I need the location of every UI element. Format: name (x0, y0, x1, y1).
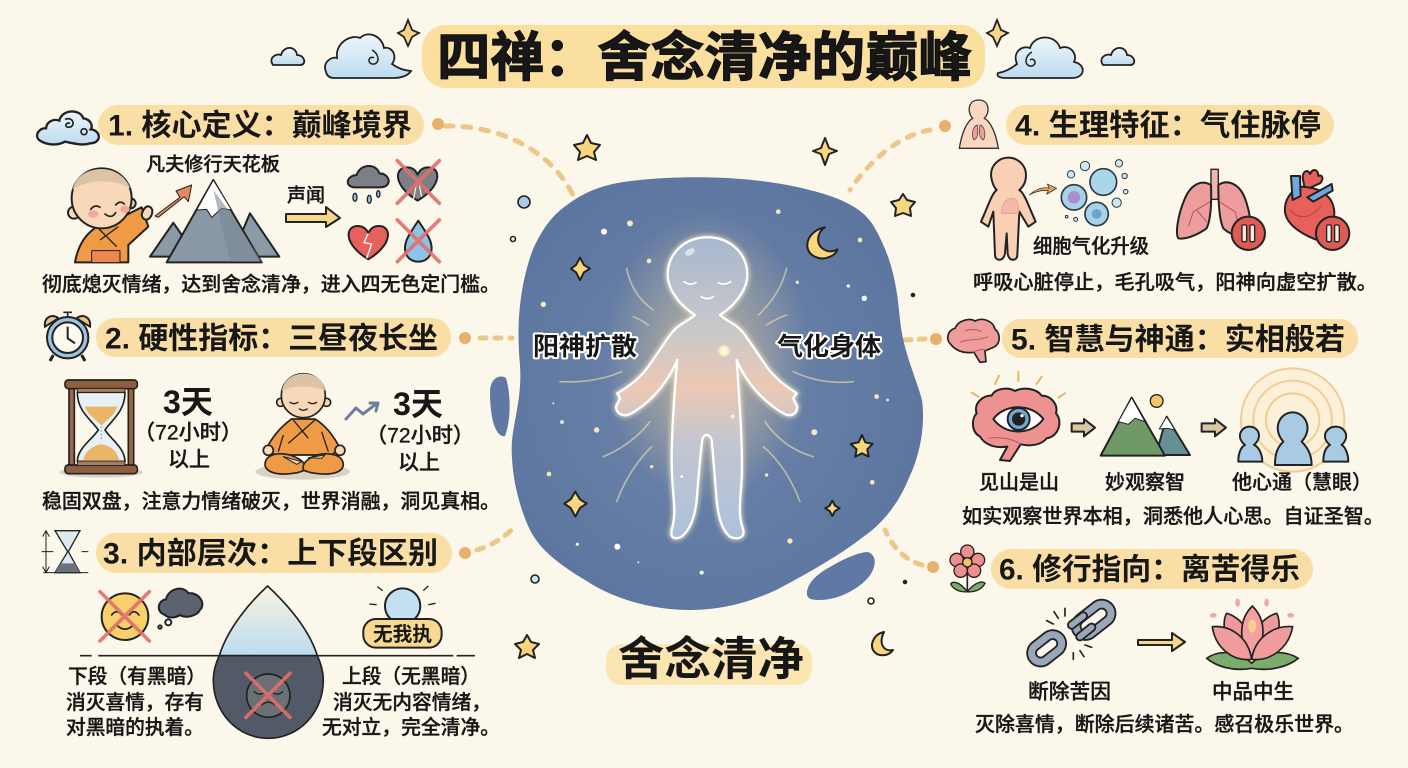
text: 3 days left: 以上 (168, 448, 210, 472)
text: section 5 summary: 如实观察世界本相，洞悉他人心思。自证圣智。 (962, 505, 1384, 528)
illustration: hourglass (59, 380, 143, 478)
illustration: monk points to mountain (68, 168, 279, 263)
label: cell upgrade: 细胞气化升级 (1033, 235, 1149, 258)
panel: section 6 (950, 545, 1354, 736)
labels: three stages (979, 471, 1372, 494)
icon: squiggle arrow (346, 403, 378, 419)
labels: cut causes and rebirth: 中品中生 (1212, 680, 1294, 704)
icon: cloud (37, 111, 99, 144)
illustration: no-self orb (363, 586, 442, 648)
heading pill: 6. 修行指向：离苦得乐 (999, 554, 1300, 586)
figure glow (604, 210, 811, 503)
panel: section 2 (42, 312, 500, 513)
figure outline and face (616, 237, 797, 538)
illustration: broken chain (1028, 600, 1115, 666)
text: upper stage: 无对立，完全清净。 (322, 716, 500, 739)
illustration: body to cells (981, 158, 1128, 260)
connector end dots (432, 118, 951, 573)
labels: three stages: 他心通（慧眼） (1232, 471, 1372, 494)
text: lower stage (66, 665, 206, 739)
energy streaks (560, 268, 853, 502)
panel: section 5 (948, 319, 1384, 528)
icons: removed emotions (348, 161, 439, 262)
stars and dots (541, 209, 889, 575)
text: section 4 summary: 呼吸心脏停止，毛孔吸气，阳神向虚空扩散。 (973, 271, 1377, 294)
text: lower stage: 消灭喜情，存有 (66, 691, 204, 714)
blob side pieces (490, 377, 875, 600)
connector: section 1 to centre (445, 126, 573, 195)
labels: cut causes and rebirth (1028, 680, 1294, 704)
icon: body with lungs (959, 100, 998, 148)
text: section 1 summary: 彻底熄灭情绪，达到舍念清净，进入四无色定门槛。 (42, 272, 500, 296)
illustration: drop of two stages (80, 586, 475, 738)
text: 3 days left: 3天 (163, 384, 213, 420)
figure silhouette glow (616, 237, 797, 538)
text: 3 days right: 3天 (393, 386, 443, 422)
text: upper stage: 上段（无黑暗） (342, 665, 480, 688)
panel: section 1 (37, 105, 500, 296)
decorative stars around centre (515, 135, 915, 658)
illustration: lower-stage icons (100, 589, 202, 641)
illustration: meditating monk (255, 374, 350, 480)
text: 3 days left (134, 384, 242, 472)
title banner: 四禅：舍念清净的巅峰 (437, 28, 972, 88)
icon: top right clouds and star (987, 20, 1134, 78)
label: 无我执: 无我执 (373, 623, 432, 646)
heading pill: 3. 内部层次：上下段区别 (103, 538, 438, 570)
label: 声闻: 声闻 (287, 184, 325, 206)
heading pill: 5. 智慧与神通：实相般若 (1011, 324, 1345, 356)
labels: three stages: 见山是山 (979, 471, 1059, 494)
labels: cut causes and rebirth: 断除苦因 (1028, 680, 1111, 704)
connector: section 3 to centre (477, 525, 516, 550)
text: 3 days right: 以上 (398, 452, 440, 474)
illustration: lotus (1207, 599, 1298, 669)
connector: section 4 to centre (850, 130, 930, 190)
label: 气化身体: 气化身体 (777, 333, 881, 361)
text: upper stage: 消灭无内容情绪， (333, 691, 491, 714)
connector: section 2 to centre (480, 336, 512, 340)
heading: 舍念清净: 舍念清净 (618, 633, 804, 685)
panel: section 3 (42, 531, 500, 739)
text: upper stage (322, 665, 500, 739)
connector: section 5 to centre (905, 339, 925, 340)
icon: flower (950, 545, 985, 592)
panel: section 4 (959, 100, 1377, 294)
label: 阳神扩散: 阳神扩散 (533, 333, 637, 361)
heading pill: 1. 核心定义：巅峰境界 (108, 110, 412, 142)
text: section 6 summary: 灭除喜情，断除后续诸苦。感召极乐世界。 (975, 713, 1354, 736)
blob background (512, 177, 923, 610)
connector: section 6 to centre (885, 530, 922, 565)
icon: top left clouds and star (271, 20, 419, 78)
icon: alarm clock (45, 312, 90, 361)
text: section 2 summary: 稳固双盘，注意力情绪破灭，世界消融，洞见真相。 (42, 490, 500, 513)
icon: yellow arrow (286, 207, 340, 227)
text: lower stage: 下段（有黑暗） (68, 665, 206, 688)
icon: hourglass measure (42, 531, 88, 573)
icon: brain (948, 319, 999, 362)
heading pill: 4. 生理特征：气住脉停 (1015, 110, 1321, 142)
text: 3 days right (366, 386, 474, 474)
icons: stars and moon in sky (564, 227, 873, 517)
small orbit dots (510, 196, 914, 604)
illustration: brain eye, mountains, people (972, 368, 1348, 472)
central figure (541, 209, 889, 575)
panel: central meditation body (490, 177, 923, 610)
label: ceiling: 凡夫修行天花板 (146, 154, 280, 176)
text: lower stage: 对黑暗的执着。 (66, 716, 204, 739)
labels: three stages: 妙观察智 (1105, 471, 1185, 494)
illustration: lungs and heart paused (1177, 169, 1349, 250)
heading pill: 2. 硬性指标：三昼夜长坐 (105, 322, 438, 356)
icon: yellow arrow (1138, 633, 1185, 651)
text: 3 days right: （72小时） (366, 424, 474, 448)
text: 3 days left: （72小时） (134, 422, 242, 444)
